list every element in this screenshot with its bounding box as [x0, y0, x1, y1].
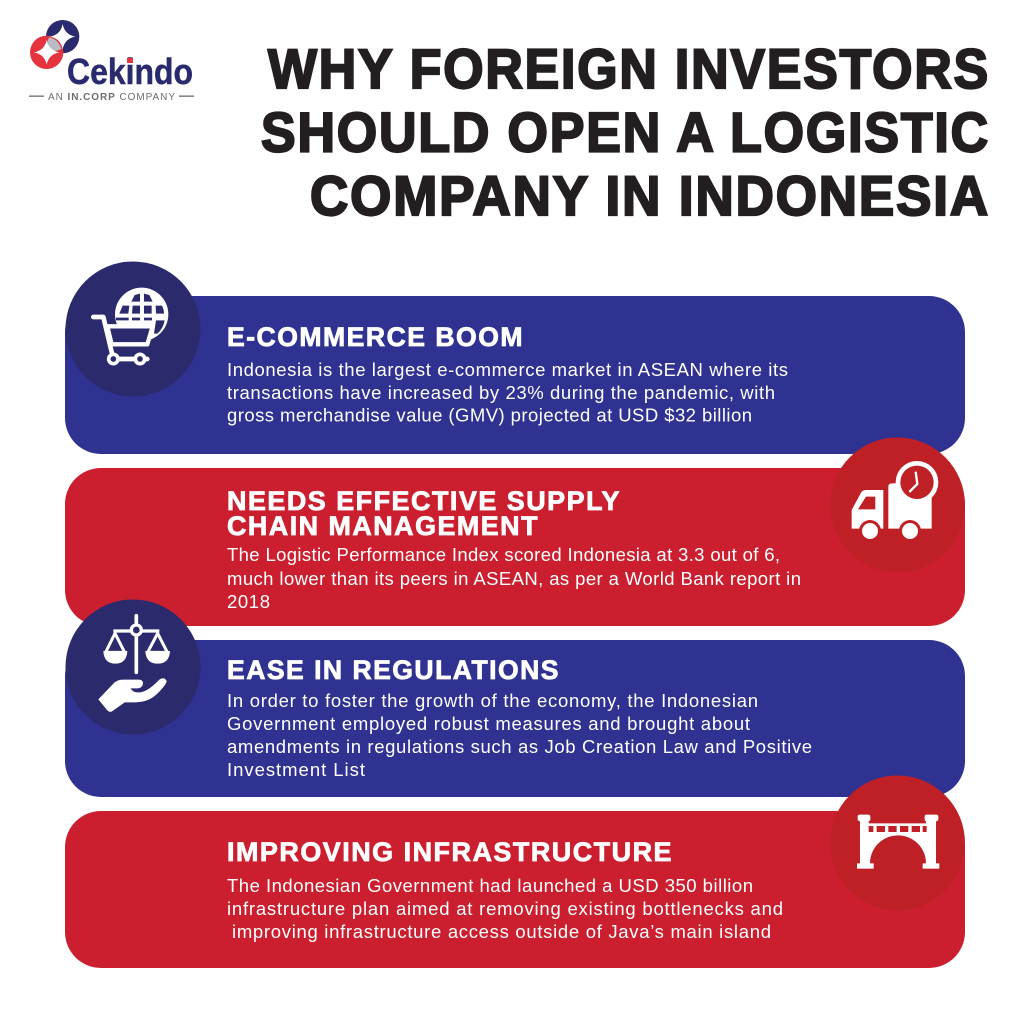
body text: gross merchandise value (GMV) projected at USD $32 billion [227, 404, 752, 426]
body text: 2018 [227, 591, 270, 612]
heading: EASE IN REGULATIONS [227, 655, 560, 685]
body text: Government employed robust measures and brought about [227, 713, 750, 734]
body text: Indonesia is the largest e-commerce market in ASEAN where its [227, 359, 788, 380]
body text: amendments in regulations such as Job Creation Law and Positive [227, 736, 812, 757]
cart [93, 317, 153, 364]
title [261, 37, 990, 227]
panel: improving infrastructure [65, 811, 965, 968]
body text: infrastructure plan aimed at removing existing bottlenecks and [227, 898, 783, 919]
icon: scales over open hand [66, 600, 200, 734]
globe [115, 288, 168, 341]
body text [227, 690, 812, 780]
body text: transactions have increased by 23% during the pandemic, with [227, 382, 775, 403]
card background [65, 468, 965, 626]
title: COMPANY IN INDONESIA [310, 164, 990, 227]
logo tagline: AN IN.CORP COMPANY [48, 92, 175, 103]
card background [65, 296, 965, 454]
heading [227, 486, 621, 541]
icon: bridge [830, 776, 965, 910]
logo mark [30, 20, 79, 69]
heading: IMPROVING INFRASTRUCTURE [227, 837, 673, 867]
icon: shopping cart with globe [66, 262, 200, 396]
body text [227, 359, 788, 426]
body text: In order to foster the growth of the economy, the Indonesian [227, 690, 758, 711]
panel: ease in regulations [65, 640, 965, 797]
title: SHOULD OPEN A LOGISTIC [261, 100, 990, 164]
icon: delivery truck with clock [830, 438, 965, 572]
panel: needs effective supply chain management [65, 468, 965, 626]
logo wordmark: Cekindo [67, 51, 193, 92]
body text: The Logistic Performance Index scored Indonesia at 3.3 out of 6, [227, 544, 780, 565]
body text [227, 875, 783, 942]
body text: The Indonesian Government had launched a USD 350 billion [227, 875, 753, 896]
card background [65, 640, 965, 797]
logo: Cekindo [29, 20, 194, 103]
logo dot accent [127, 58, 133, 63]
body text: Investment List [227, 759, 365, 780]
heading: CHAIN MANAGEMENT [227, 511, 539, 541]
body text [227, 544, 801, 612]
heading: NEEDS EFFECTIVE SUPPLY [227, 486, 621, 516]
body text: improving infrastructure access outside of Java’s main island [232, 921, 771, 942]
heading: E-COMMERCE BOOM [227, 322, 524, 352]
body text: much lower than its peers in ASEAN, as per a World Bank report in [227, 568, 801, 589]
card background [65, 811, 965, 968]
panel: e-commerce boom [65, 296, 965, 454]
